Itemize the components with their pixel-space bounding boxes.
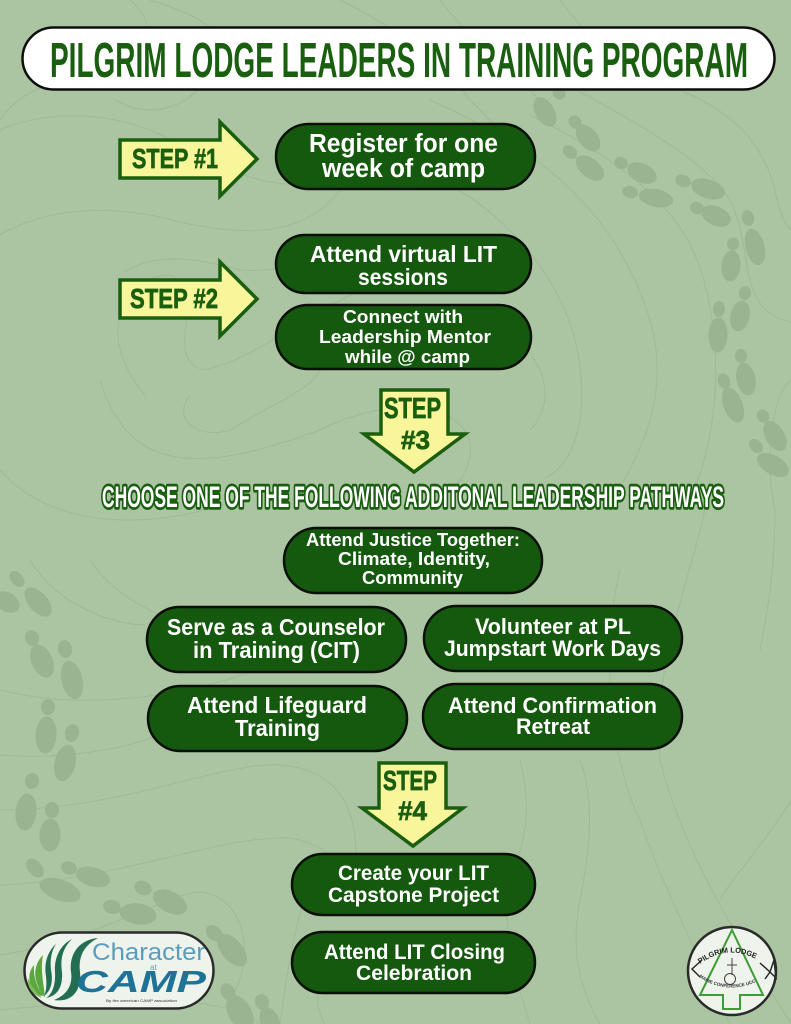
pathway box: counselor in training <box>147 607 406 672</box>
title banner <box>22 28 774 90</box>
pathway box: lifeguard: Attend Lifeguard <box>187 692 367 718</box>
fish outline <box>692 960 776 979</box>
step 2 box: mentor: Connect with <box>343 306 463 327</box>
step 3 arrow: STEP <box>384 393 441 425</box>
logo: Pilgrim Lodge <box>686 926 778 1016</box>
pathway box: justice together: Community <box>362 568 463 588</box>
final box: capstone: Create your LIT <box>338 861 489 885</box>
pathway box: counselor in training: in Training (CIT) <box>193 637 360 663</box>
final box: capstone <box>292 854 535 915</box>
step 2 box: mentor: while @ camp <box>344 346 470 367</box>
step 1 arrow <box>120 122 257 196</box>
step 1 box: register: week of camp <box>321 155 485 183</box>
pathway box: confirmation: Retreat <box>516 714 591 739</box>
pathway box: jumpstart: Volunteer at PL <box>475 614 631 639</box>
logo wordmark: Character <box>92 939 205 966</box>
pathway box: jumpstart: Jumpstart Work Days <box>444 636 661 661</box>
step 2 box: virtual sessions: sessions <box>358 264 448 290</box>
final box: capstone: Capstone Project <box>328 883 499 907</box>
icon: feather wing <box>28 938 98 1000</box>
step 2 arrow: STEP #2 <box>130 283 218 314</box>
step 2 box: virtual sessions <box>276 235 531 293</box>
pathway box: counselor in training: Serve as a Counselor <box>167 614 385 640</box>
step 1 box: register <box>276 124 535 189</box>
tree outline <box>700 930 763 1009</box>
step 1 box: register: Register for one <box>309 130 498 158</box>
logo: Character at Camp: By the american CAMP association <box>106 998 177 1003</box>
final box: closing celebration: Celebration <box>356 961 472 985</box>
step 3 arrow: #3 <box>401 425 430 455</box>
logo: Character at Camp: at <box>150 963 157 972</box>
decorative footprints, upper right <box>529 84 791 482</box>
pathway box: justice together: Attend Justice Together: <box>306 530 520 550</box>
logo: Pilgrim Lodge: MAINE CONFERENCE UCC <box>699 974 756 988</box>
step 2 box: mentor <box>276 305 531 369</box>
final box: closing celebration <box>292 932 535 993</box>
step 3 arrow <box>364 390 465 472</box>
logo arc text: PILGRIM LODGE <box>698 947 758 964</box>
pathway box: jumpstart <box>424 606 682 671</box>
pathway box: justice together: Climate, Identity, <box>338 549 490 569</box>
step 2 box: virtual sessions: Attend virtual LIT <box>310 241 497 267</box>
logo: Character at Camp <box>24 932 214 1008</box>
pathway box: lifeguard: Training <box>235 715 320 741</box>
step 1 arrow: STEP #1 <box>132 143 218 174</box>
step 4 arrow: #4 <box>398 796 427 826</box>
step 2 arrow <box>120 262 257 336</box>
pathway box: confirmation: Attend Confirmation <box>448 693 657 718</box>
pathway box: confirmation <box>423 684 682 749</box>
step 4 arrow: STEP <box>383 765 437 796</box>
decorative footprints, lower left <box>0 568 285 1024</box>
cross and circle <box>727 958 737 975</box>
pathway box: justice together <box>284 528 542 593</box>
logo: Character at Camp: CAMP <box>76 964 206 999</box>
step 2 box: mentor: Leadership Mentor <box>319 326 491 347</box>
pathway box: lifeguard <box>148 686 407 751</box>
step 4 arrow <box>362 763 463 846</box>
final box: closing celebration: Attend LIT Closing <box>324 940 505 964</box>
